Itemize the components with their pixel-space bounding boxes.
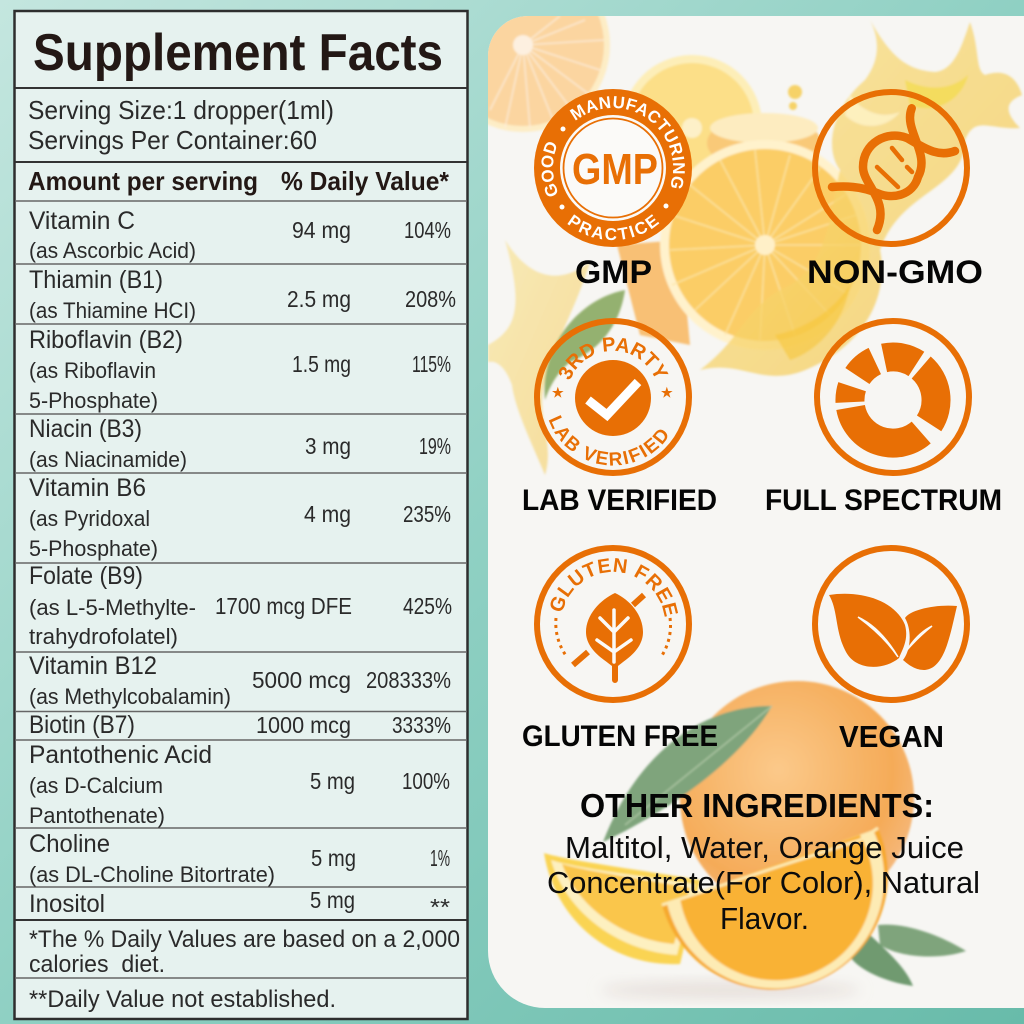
row: pantothenic acid: (as D-Calcium — [29, 773, 163, 798]
icon: full spectrum — [817, 321, 969, 473]
icon: non-GMO DNA — [815, 92, 967, 244]
row: pantothenic acid: 5 mg — [310, 768, 355, 794]
row: pantothenic acid — [29, 741, 450, 828]
panel: supplement facts table — [14, 11, 468, 1019]
serving information: Servings Per Container:60 — [28, 125, 317, 155]
label: vegan: VEGAN — [839, 719, 944, 754]
row: vitamin B6 — [29, 474, 451, 561]
row: choline: 1% — [430, 845, 450, 871]
row: biotin: 3333% — [392, 712, 451, 738]
icon: lab verified badge — [534, 318, 692, 476]
row: vitamin C — [29, 207, 451, 263]
text: ingredient list: Flavor. — [720, 901, 809, 936]
text: ingredient list — [547, 830, 980, 936]
row: vitamin B6: 4 mg — [304, 501, 351, 527]
label: lab verified: LAB VERIFIED — [522, 484, 717, 517]
row: niacin: 19% — [419, 433, 451, 459]
row: thiamin: 2.5 mg — [287, 286, 351, 312]
row: riboflavin: Riboflavin (B2) — [29, 326, 183, 354]
label: GMP: GMP — [575, 254, 652, 290]
table header: Amount per serving — [28, 166, 258, 196]
row: vitamin C: 94 mg — [292, 217, 351, 243]
icon: GMP badge: MANUFACTURING — [570, 96, 685, 188]
row: niacin: (as Niacinamide) — [29, 447, 187, 472]
panel: product badges — [488, 16, 1024, 1008]
row: biotin: 1000 mcg — [256, 712, 351, 738]
icon: GMP badge — [534, 89, 692, 247]
row: folate — [29, 562, 452, 649]
row: folate: 425% — [403, 593, 452, 619]
row: pantothenic acid: Pantothenate) — [29, 803, 165, 828]
row: riboflavin — [29, 326, 451, 413]
row: thiamin: (as Thiamine HCI) — [29, 298, 196, 323]
serving information: Serving Size:1 dropper(1ml) — [28, 95, 334, 125]
icon: vegan leaves — [815, 548, 967, 700]
title: Supplement Facts — [33, 24, 443, 82]
row: vitamin B6: 5-Phosphate) — [29, 536, 158, 561]
row: vitamin B12: Vitamin B12 — [29, 652, 157, 680]
row: folate: trahydrofolatel) — [29, 624, 178, 649]
text: ingredient list: Maltitol, Water, Orange Juice — [565, 830, 964, 865]
icon: gluten free: GLUTEN FREE — [550, 558, 678, 617]
row: inositol: ** — [430, 894, 450, 920]
table header: % Daily Value* — [281, 166, 450, 196]
row: choline: 5 mg — [311, 845, 356, 871]
row: vitamin B6: Vitamin B6 — [29, 474, 146, 502]
row: folate: 1700 mcg DFE — [215, 593, 352, 619]
row: niacin — [29, 415, 451, 472]
icon: GMP badge: PRACTICE — [568, 214, 660, 240]
footnote: daily values: calories diet. — [29, 951, 165, 978]
footnote: daily values — [29, 926, 460, 978]
row: inositol: Inositol — [29, 890, 105, 918]
row: choline: (as DL-Choline Bitortrate) — [29, 862, 275, 887]
icon: lab verified badge: 3RD PARTY — [558, 337, 668, 380]
row: niacin: 3 mg — [305, 433, 351, 459]
row: thiamin: 208% — [405, 286, 456, 312]
icon: lab verified badge: ★ — [661, 385, 673, 400]
serving information — [28, 95, 334, 155]
footnote: daily values: *The % Daily Values are based on a 2,000 — [29, 926, 460, 953]
row: inositol — [29, 887, 450, 920]
label: gluten free: GLUTEN FREE — [522, 720, 718, 753]
row: thiamin: Thiamin (B1) — [29, 266, 163, 294]
photo: orange slices and juice splash — [436, 0, 1022, 998]
icon: GMP badge: GOOD — [541, 142, 558, 196]
row: vitamin C: 104% — [404, 217, 451, 243]
row: thiamin — [29, 266, 456, 323]
row: inositol: 5 mg — [310, 887, 355, 913]
row: niacin: Niacin (B3) — [29, 415, 142, 443]
row: vitamin B6: (as Pyridoxal — [29, 506, 150, 531]
row: biotin — [29, 711, 451, 739]
icon: lab verified badge: ★ — [552, 385, 564, 400]
icon: gluten free — [534, 545, 692, 703]
row: biotin: Biotin (B7) — [29, 711, 135, 739]
row: folate: Folate (B9) — [29, 562, 143, 590]
row: vitamin B12: 208333% — [366, 667, 451, 693]
row: riboflavin: 5-Phosphate) — [29, 388, 158, 413]
label: non-GMO: NON-GMO — [807, 254, 983, 290]
icon: GMP badge: GMP — [572, 145, 658, 194]
row: vitamin C: (as Ascorbic Acid) — [29, 238, 196, 263]
label: full spectrum: FULL SPECTRUM — [765, 484, 1002, 517]
row: pantothenic acid: 100% — [402, 768, 450, 794]
row: vitamin B12: (as Methylcobalamin) — [29, 684, 231, 709]
row: choline — [29, 830, 450, 887]
icon: lab verified badge: LAB VERIFIED — [548, 415, 668, 466]
footnote: not established: **Daily Value not established. — [29, 986, 336, 1013]
row: folate: (as L-5-Methylte- — [29, 595, 196, 620]
text: ingredient list: Concentrate(For Color), Natural — [547, 865, 980, 900]
heading: other ingredients: OTHER INGREDIENTS: — [580, 787, 934, 824]
row: vitamin B12 — [29, 652, 451, 709]
row: vitamin B12: 5000 mcg — [252, 667, 351, 693]
row: choline: Choline — [29, 830, 110, 858]
row: riboflavin: 115% — [412, 351, 451, 377]
row: vitamin C: Vitamin C — [29, 207, 135, 235]
row: riboflavin: 1.5 mg — [292, 351, 351, 377]
row: pantothenic acid: Pantothenic Acid — [29, 741, 212, 769]
row: riboflavin: (as Riboflavin — [29, 358, 156, 383]
row: vitamin B6: 235% — [403, 501, 451, 527]
table header — [28, 166, 450, 196]
